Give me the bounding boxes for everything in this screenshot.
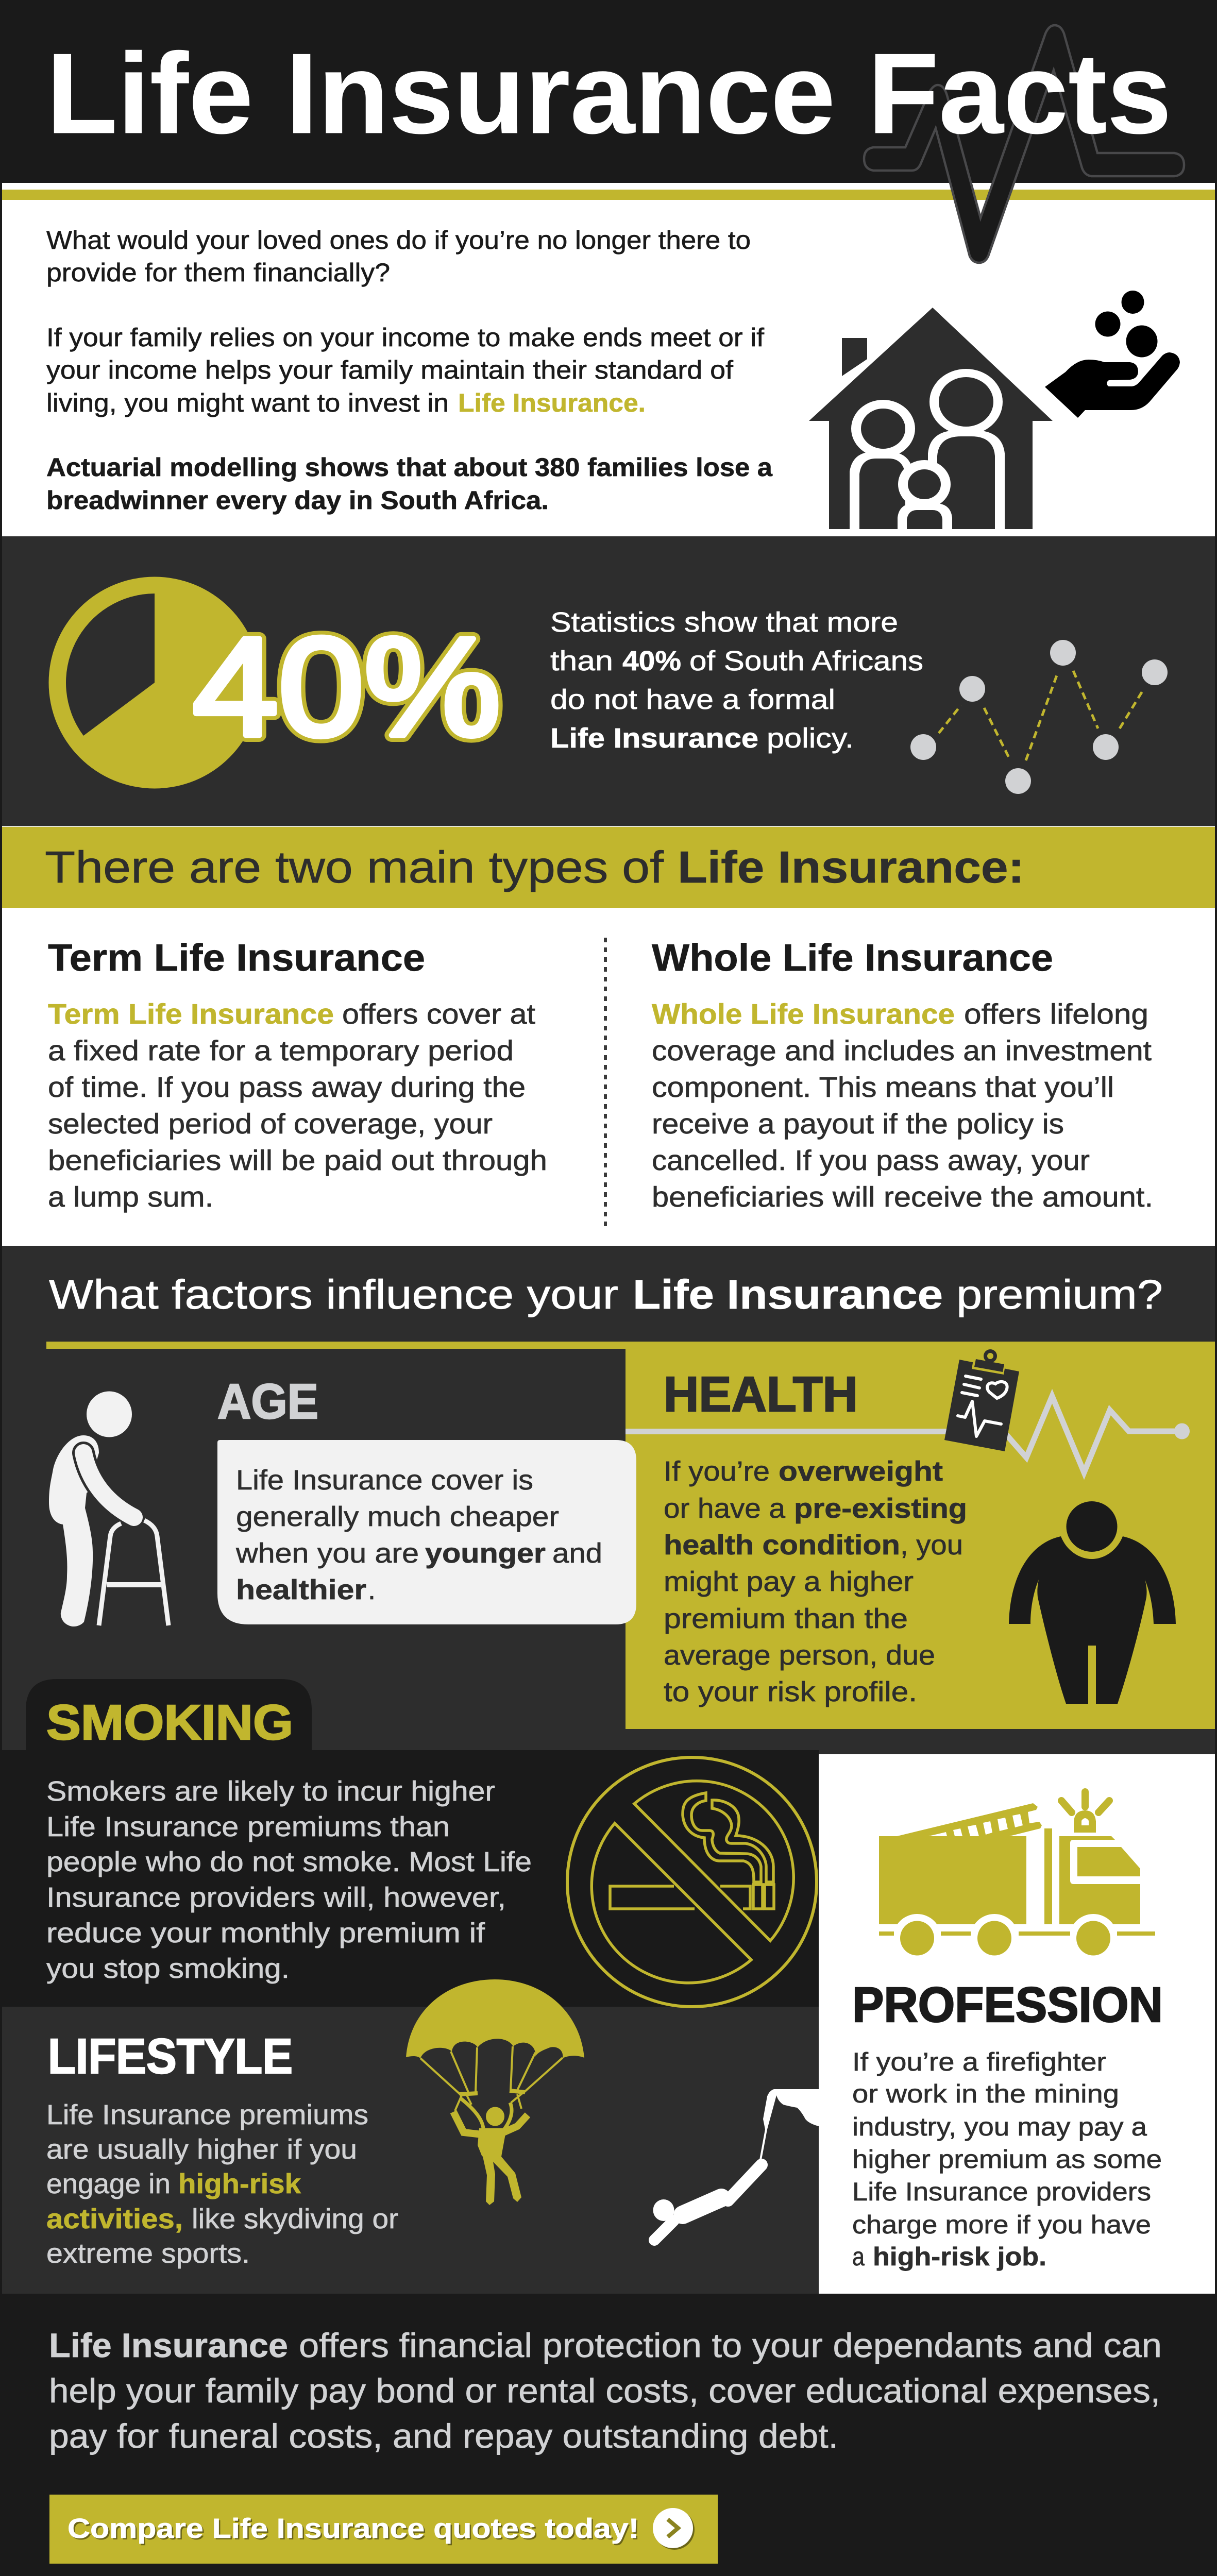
heading: two main types: [45, 842, 1024, 892]
button: compare quotes: Compare Life Insurance quotes today!: [69, 2515, 640, 2546]
text: closing statement: help your family pay bond or rental costs, cover educational expenses,: [49, 2371, 1160, 2410]
heading: whole life: Whole Life Insurance: [652, 936, 1053, 979]
panel: profession: [819, 1754, 1217, 2294]
icon: dotted line graph: [910, 640, 1168, 794]
text: whole life description: Whole Life Insurance: [652, 998, 955, 1030]
text: lifestyle description: are usually higher if you: [46, 2134, 357, 2165]
text: opening question: provide for them financially?: [46, 258, 390, 287]
title: Life Insurance Facts: [46, 30, 1172, 158]
icon: house with family: [809, 308, 1053, 529]
button: compare quotes: Compare Life Insurance quotes today!: [67, 2513, 639, 2544]
text: whole life description: component. This means that you’ll: [652, 1071, 1114, 1103]
text: health description: or have a: [664, 1493, 786, 1524]
text: lifestyle description: engage in: [46, 2168, 171, 2199]
text: health description: average person, due: [664, 1640, 935, 1671]
icon: elderly person with walker: [49, 1391, 168, 1626]
text: whole life description: beneficiaries will receive the amount.: [652, 1181, 1153, 1213]
text: lifestyle description: Life Insurance premiums: [46, 2099, 368, 2130]
heading: factors: What factors influence your: [49, 1272, 618, 1317]
panel: smoking: [0, 1679, 819, 2007]
text: health description: If you’re: [664, 1456, 770, 1487]
heading: profession: PROFESSION: [852, 1977, 1163, 2032]
icon: medical clipboard: [944, 1349, 1019, 1451]
icon: fire truck: [879, 1792, 1155, 1962]
text: profession description: or work in the mining: [852, 2079, 1119, 2108]
column: term life insurance: [48, 936, 547, 1213]
text: closing statement: Life Insurance: [49, 2326, 288, 2364]
panel: footer: [0, 2294, 1217, 2576]
text: statistic: than: [550, 646, 613, 676]
text: health description: pre-existing: [794, 1493, 967, 1524]
text: term life description: a fixed rate for a temporary period: [48, 1035, 514, 1066]
icon: bungee jumper: [653, 2089, 819, 2240]
panel: introduction: [46, 226, 1180, 529]
button: compare quotes: [49, 2495, 718, 2564]
text: profession description: Life Insurance providers: [852, 2177, 1151, 2206]
icon: no smoking sign: [567, 1757, 817, 2007]
text: term life description: [48, 998, 547, 1213]
text: age description: healthier: [236, 1574, 366, 1605]
text: smoking description: Life Insurance premiums than: [46, 1811, 450, 1842]
text: profession description: [852, 2047, 1162, 2271]
text: term life description: beneficiaries will be paid out through: [48, 1144, 547, 1176]
text: term life description: offers cover at: [342, 998, 535, 1030]
panel: health: [626, 1342, 1217, 1729]
text: statistic: of South Africans: [689, 646, 923, 676]
text: profession description: charge more if you have: [852, 2210, 1151, 2239]
text: statistic: do not have a formal: [550, 684, 835, 715]
text: smoking description: Smokers are likely to incur higher: [46, 1776, 495, 1807]
text: health description: to your risk profile.: [664, 1676, 917, 1707]
text: smoking description: reduce your monthly premium if: [46, 1918, 485, 1948]
heading: two main types: There are two main types of: [45, 842, 664, 892]
panel: header: [0, 0, 1217, 536]
text: lifestyle description: extreme sports.: [46, 2238, 250, 2269]
big number: 40%: 40%: [193, 608, 501, 765]
column: whole life insurance: [652, 936, 1153, 1213]
text: age description: generally much cheaper: [236, 1501, 559, 1532]
heading: lifestyle: LIFESTYLE: [48, 2029, 293, 2084]
text: profession description: a: [852, 2242, 865, 2271]
text: income paragraph: Life Insurance.: [458, 388, 646, 417]
text: smoking description: [46, 1776, 532, 1984]
text: income paragraph: [46, 323, 764, 417]
panel: two main types heading: [0, 826, 1217, 908]
text: opening question: What would your loved ones do if you’re no longer there to: [46, 226, 751, 255]
text: closing statement: offers financial protection to your dependants and can: [299, 2326, 1162, 2364]
icon: overweight person: [1009, 1501, 1176, 1704]
text: lifestyle description: like skydiving or: [192, 2204, 398, 2234]
text: opening question: [46, 226, 751, 287]
text: statistic: 40%: [622, 646, 681, 676]
text: statistic: policy.: [767, 723, 854, 754]
text: health description: premium than the: [664, 1603, 908, 1634]
text: term life description: selected period of coverage, your: [48, 1108, 493, 1140]
text: age description: younger: [425, 1538, 546, 1569]
text: whole life description: coverage and includes an investment: [652, 1035, 1152, 1066]
text: health description: health condition: [664, 1530, 900, 1561]
text: income paragraph: living, you might want to invest in: [46, 388, 449, 417]
text: profession description: industry, you may pay a: [852, 2112, 1147, 2141]
text: lifestyle description: activities,: [46, 2204, 183, 2234]
panel: lifestyle: [46, 1979, 819, 2269]
text: income paragraph: your income helps your family maintain their standard of: [46, 355, 733, 384]
icon: hand with coins: [1045, 291, 1180, 418]
big number: 40%: 40%: [193, 608, 501, 765]
text: actuarial statement: [46, 453, 773, 515]
icon: heartbeat line: [864, 25, 1184, 263]
panel: 40 percent statistic: [0, 536, 1217, 826]
heading: factors: [49, 1272, 1163, 1317]
text: lifestyle description: [46, 2099, 398, 2269]
text: statistic: [550, 607, 923, 754]
text: health description: might pay a higher: [664, 1566, 914, 1597]
heading: smoking: SMOKING: [46, 1695, 293, 1750]
text: statistic: Life Insurance: [550, 723, 758, 754]
icon: parachutist: [406, 1979, 584, 2205]
text: statistic: Statistics show that more: [550, 607, 898, 638]
text: lifestyle description: high-risk: [178, 2168, 301, 2199]
text: whole life description: receive a payout if the policy is: [652, 1108, 1064, 1140]
text: actuarial statement: Actuarial modelling shows that about 380 families lose a: [46, 453, 773, 482]
panel: age: [49, 1374, 636, 1626]
text: whole life description: [652, 998, 1153, 1213]
heading: factors: Life Insurance: [633, 1272, 943, 1317]
text: age description: [217, 1440, 636, 1624]
text: age description: when you are: [235, 1538, 419, 1569]
text: income paragraph: If your family relies on your income to make ends meet or if: [46, 323, 764, 352]
text: health description: overweight: [779, 1456, 943, 1487]
text: health description: , you: [900, 1530, 963, 1561]
text: smoking description: Insurance providers will, however,: [46, 1882, 506, 1913]
text: smoking description: you stop smoking.: [46, 1953, 290, 1984]
icon: pulse line: [626, 1396, 1190, 1472]
text: profession description: higher premium as some: [852, 2145, 1162, 2174]
text: age description: and: [552, 1538, 602, 1569]
text: actuarial statement: breadwinner every day in South Africa.: [46, 486, 549, 515]
text: health description: [664, 1456, 967, 1707]
text: whole life description: cancelled. If you pass away, your: [652, 1144, 1090, 1176]
text: profession description: If you’re a firefighter: [852, 2047, 1106, 2076]
text: whole life description: offers lifelong: [964, 998, 1148, 1030]
text: closing statement: pay for funeral costs, and repay outstanding debt.: [49, 2417, 838, 2455]
panel: insurance types: [0, 908, 1217, 1246]
text: profession description: high-risk job.: [873, 2242, 1046, 2271]
text: term life description: Term Life Insurance: [48, 998, 334, 1030]
heading: health: HEALTH: [664, 1367, 858, 1422]
heading: term life: Term Life Insurance: [48, 936, 425, 979]
heading: factors: premium?: [956, 1272, 1163, 1317]
heading: two main types: Life Insurance:: [678, 842, 1024, 892]
pie chart: 40 percent: [48, 577, 261, 788]
text: age description: Life Insurance cover is: [236, 1465, 533, 1496]
text: term life description: of time. If you pass away during the: [48, 1071, 526, 1103]
text: smoking description: people who do not smoke. Most Life: [46, 1846, 532, 1877]
heading: age: AGE: [217, 1374, 318, 1429]
text: closing statement: [49, 2326, 1162, 2455]
text: age description: .: [368, 1574, 376, 1605]
text: term life description: a lump sum.: [48, 1181, 213, 1213]
